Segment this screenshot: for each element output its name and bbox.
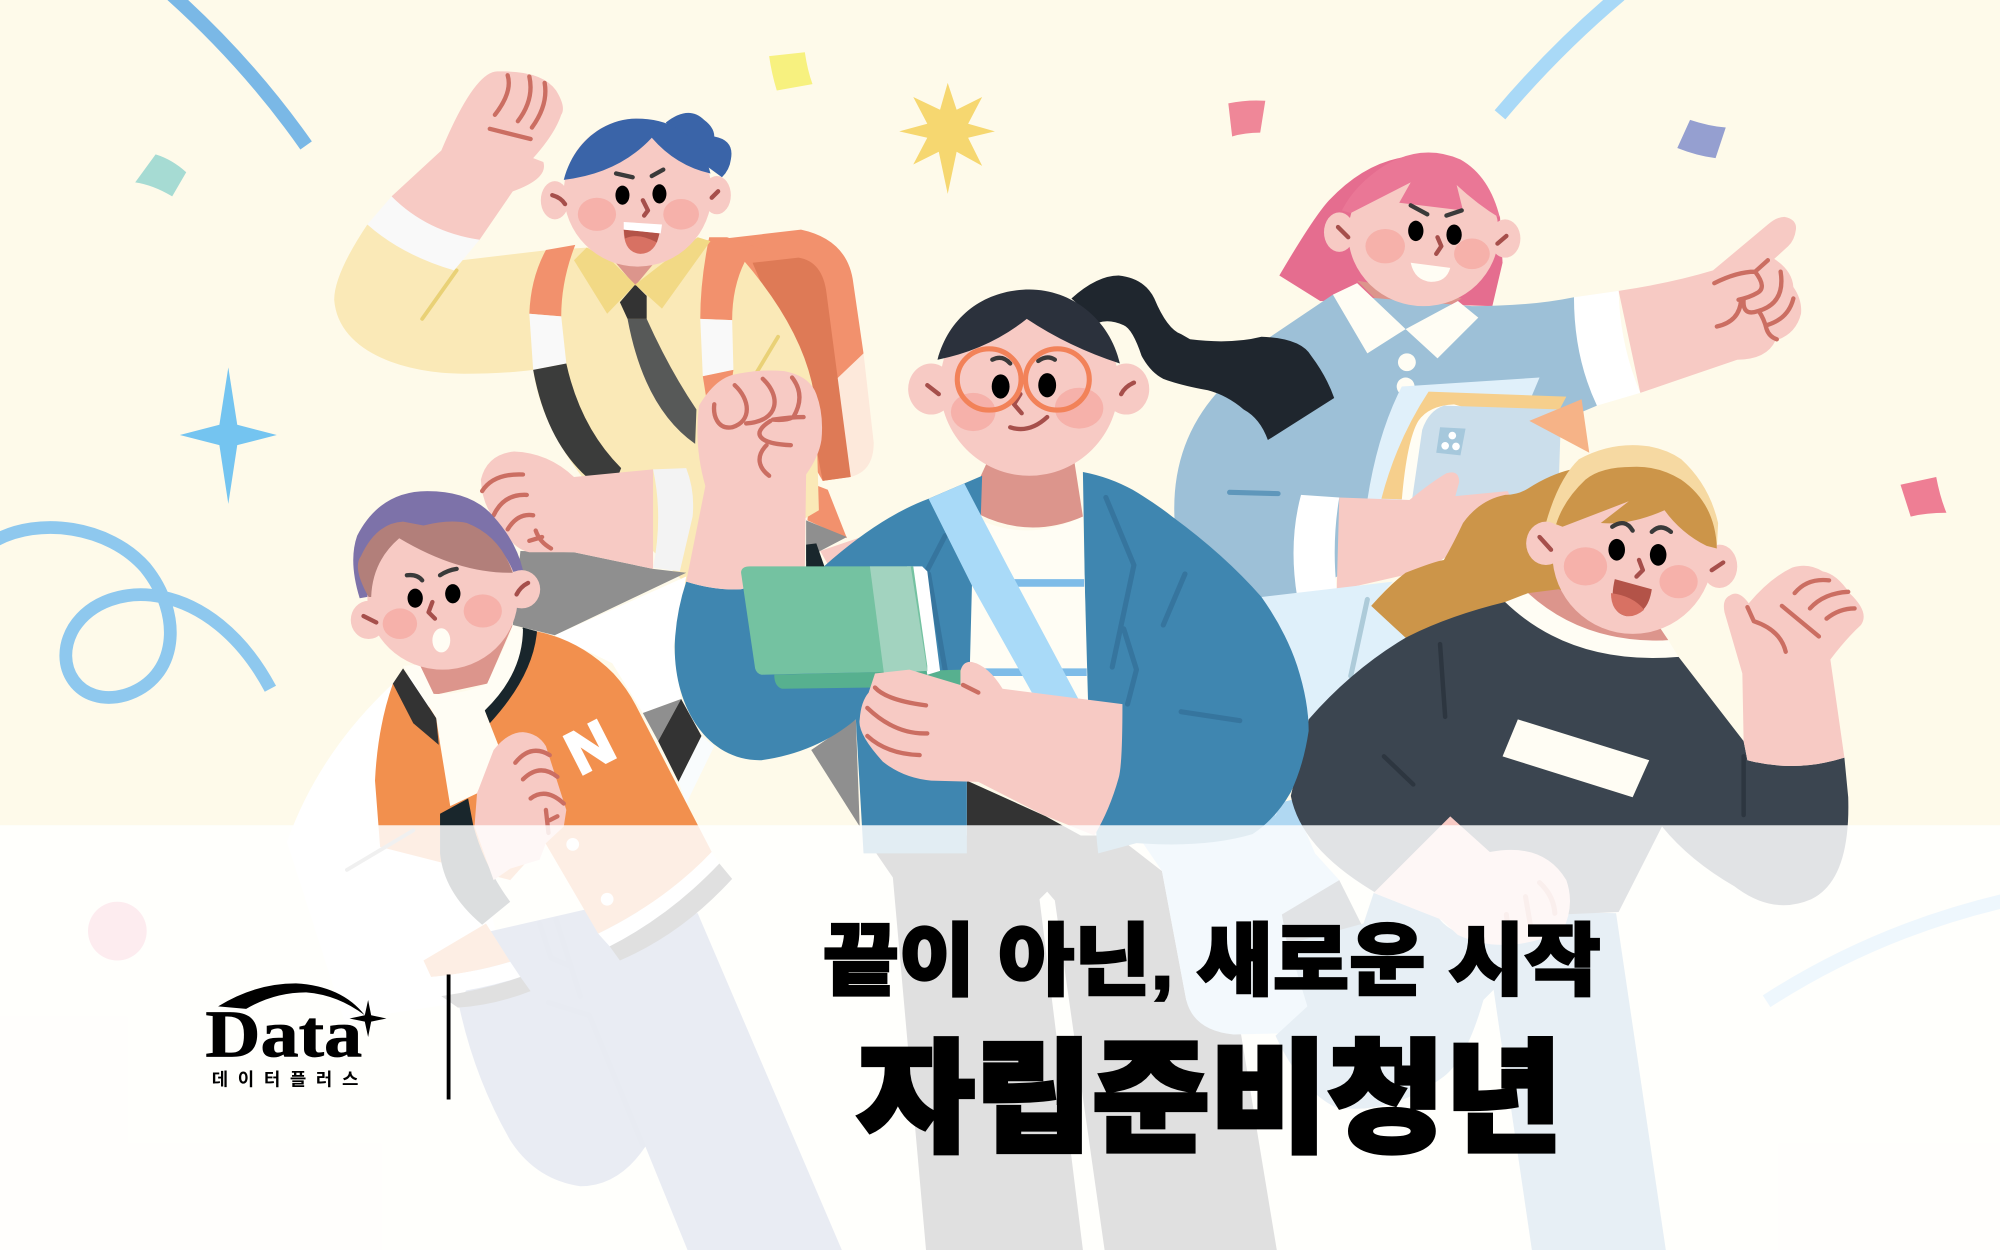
- cheek right: [1454, 239, 1490, 269]
- brows: [407, 569, 457, 580]
- brows: [1411, 205, 1462, 216]
- nose, smile and ear marks: [927, 383, 1134, 429]
- paper: [1367, 378, 1540, 504]
- strap orange tip: [703, 370, 733, 408]
- nose and ear marks: [1540, 537, 1723, 577]
- backpack inner: [753, 258, 851, 481]
- cheek right: [1055, 388, 1103, 429]
- shirt stripe lower: [985, 668, 1087, 676]
- collar left: [1333, 283, 1406, 353]
- lens right: [1026, 349, 1089, 410]
- lower bodies and legs: [287, 663, 1666, 1250]
- title: subtitle line: 끝이 아닌, 새로운 시작: [823, 917, 1601, 1006]
- orange sleeve lower left: [423, 923, 510, 977]
- brows: [992, 357, 1055, 364]
- lens left: [1441, 442, 1449, 450]
- button two: [1397, 378, 1415, 395]
- raised fist lines: [714, 378, 804, 476]
- raised arm and fist: [1724, 566, 1864, 766]
- backpack lower corner: [807, 483, 847, 538]
- book lower cover: [774, 670, 963, 689]
- hair: [564, 119, 710, 180]
- white scarf: [403, 625, 523, 806]
- sweater creases: [1384, 644, 1744, 815]
- strap orange part: [529, 245, 575, 316]
- face: [1348, 161, 1499, 306]
- icon: gold star: [899, 83, 995, 194]
- strap white part: [529, 314, 566, 370]
- dark lining: [440, 798, 510, 925]
- name badge: [1503, 719, 1649, 797]
- ear right: [1103, 364, 1149, 415]
- streamer: top left: [172, 0, 306, 145]
- hair bun: [666, 113, 731, 177]
- ear left: [1526, 522, 1566, 565]
- cuff: [1574, 291, 1640, 406]
- strap orange part: [700, 237, 765, 320]
- pointing hand lines: [1714, 260, 1793, 339]
- long hair: [1371, 469, 1571, 638]
- neck: [1357, 281, 1462, 329]
- jacket cuff white: [598, 852, 719, 946]
- phone camera: [1436, 427, 1466, 455]
- jacket letter N: N: [555, 708, 624, 787]
- collar right dark: [485, 628, 537, 723]
- camera lenses: [1441, 432, 1460, 450]
- eye right: [1650, 544, 1666, 566]
- grey trouser wedge: [811, 719, 860, 827]
- confetti: teal: [135, 154, 186, 196]
- ear right: [503, 570, 540, 608]
- pale strap: [679, 736, 714, 804]
- hair top: [1556, 467, 1717, 548]
- mouth: [432, 628, 450, 652]
- ear right: [1490, 219, 1520, 258]
- torso crease: [755, 337, 778, 375]
- button one: [566, 838, 579, 851]
- cheek right: [663, 199, 699, 230]
- logo wordmark: Data: [205, 999, 362, 1072]
- icon: blue sparkle: [180, 367, 277, 504]
- nose and ear marks: [552, 191, 718, 216]
- grey trouser triangle: [1282, 880, 1362, 950]
- jacket right panel: [1083, 472, 1309, 853]
- left white coat: [287, 663, 510, 1020]
- pale blue coat: [1261, 582, 1407, 816]
- eye right: [1446, 224, 1462, 245]
- ears: [541, 181, 569, 219]
- back hair: [1279, 156, 1503, 306]
- character: pink-haired woman pointing: [1174, 152, 1801, 597]
- confetti: purple: [1677, 120, 1726, 158]
- jacket buttons: [566, 838, 614, 906]
- torso: [533, 240, 819, 587]
- hand lines: [515, 751, 564, 833]
- neck: [420, 625, 513, 695]
- collar left: [574, 247, 635, 314]
- character: blue-haired boy with backpack: [334, 71, 874, 587]
- neck: [614, 260, 654, 286]
- backpack side panel: [816, 353, 874, 477]
- lower grey wedge: [643, 699, 681, 741]
- raised fist finger lines: [490, 75, 545, 139]
- backpack strap left: [529, 245, 621, 477]
- ear left: [1324, 212, 1355, 252]
- eye right: [652, 184, 666, 203]
- streamer: left swirl: [0, 528, 270, 697]
- eye right: [445, 584, 460, 603]
- backpack strap right: [700, 237, 765, 408]
- shirt buttons: [1397, 353, 1416, 395]
- face: [367, 524, 518, 670]
- white translucent band: [0, 825, 2000, 1250]
- logo: Data Plus: [205, 983, 386, 1089]
- jacket cuff dark: [610, 864, 732, 960]
- cheek left: [1564, 547, 1607, 585]
- streamer: bottom right: [1767, 901, 2000, 1001]
- brows: [616, 170, 663, 177]
- strap white part: [700, 319, 733, 376]
- black strap: [658, 699, 702, 782]
- book page edge: [907, 566, 940, 675]
- ear left: [351, 601, 386, 639]
- pocket line: [1230, 492, 1278, 494]
- vertical divider: [447, 974, 451, 1099]
- orange jacket: [375, 631, 712, 934]
- coat seam: [1351, 599, 1367, 676]
- shirt body: [1174, 295, 1597, 597]
- collar left dark: [393, 668, 439, 745]
- eye left: [992, 374, 1010, 399]
- sleeve cuff: [367, 196, 480, 270]
- coat crease: [347, 830, 413, 870]
- lens top: [1448, 432, 1456, 439]
- tie lower: [628, 319, 696, 444]
- eye left: [408, 589, 423, 608]
- phone white edge: [1402, 404, 1467, 500]
- face: [940, 295, 1119, 476]
- strap black part: [533, 364, 621, 477]
- left white body: [297, 684, 393, 842]
- bridge: [1020, 379, 1026, 383]
- eye left: [615, 186, 629, 205]
- shirt stripe upper: [1011, 579, 1084, 587]
- cheek right: [464, 594, 502, 628]
- sleeve crease: [422, 270, 457, 319]
- confetti: pink top: [1228, 100, 1265, 136]
- ear left: [908, 364, 954, 415]
- forearm cuff: [1294, 495, 1339, 597]
- ear right: [703, 176, 731, 214]
- orange triangle flap: [1529, 399, 1589, 453]
- backpack: [714, 230, 874, 538]
- eye left: [1608, 539, 1625, 561]
- brows: [1612, 523, 1671, 532]
- grey trouser wedge: [513, 551, 686, 635]
- lens left: [957, 349, 1021, 410]
- confetti: pink right: [1901, 477, 1946, 517]
- confetti: pink circle: [88, 902, 147, 960]
- yellow folder: [1381, 392, 1566, 500]
- fist lines: [1747, 580, 1855, 652]
- N boy trousers: [459, 909, 842, 1250]
- eye left: [1408, 221, 1423, 241]
- hat: [353, 491, 523, 598]
- hand holding book: [859, 662, 1122, 835]
- black trousers under arm: [967, 781, 1097, 880]
- lower dark cuff left: [441, 977, 531, 1008]
- mouth shadow: [624, 230, 659, 242]
- jacket creases: [927, 497, 1240, 721]
- pointing arm: [1619, 217, 1801, 393]
- eye right: [1038, 373, 1056, 397]
- teeth: [624, 222, 662, 233]
- skin sliver behind shoulder: [820, 534, 869, 566]
- cheek left: [951, 393, 996, 431]
- streamer: top right: [1500, 0, 1620, 115]
- hand on chest: [474, 732, 566, 880]
- smile: [1411, 263, 1450, 282]
- tie knot: [620, 284, 647, 319]
- tongue: [1611, 593, 1644, 616]
- neck: [1528, 589, 1668, 643]
- lens right: [1452, 443, 1460, 450]
- jacket left panel and sleeve: [675, 476, 982, 853]
- shoulder strap: [929, 483, 1079, 700]
- bangs: [1342, 152, 1500, 218]
- hand lines: [867, 685, 978, 755]
- white coat panel: [555, 577, 686, 713]
- blond trousers and lower body: [1276, 893, 1666, 1250]
- grey wedge behind fist: [806, 520, 847, 561]
- button two: [601, 893, 614, 906]
- nose and ear marks: [1338, 227, 1506, 254]
- lower hand: [1374, 816, 1570, 945]
- neck: [978, 459, 1083, 527]
- cheek left: [383, 608, 417, 639]
- pale coat blob: [1138, 800, 1339, 1034]
- raised arm and fist: [686, 370, 822, 589]
- mouth: [624, 230, 659, 254]
- character: blond woman in dark sweater: [1261, 445, 1864, 945]
- forearm: [1337, 472, 1531, 591]
- horizontal arm and hand: [481, 452, 653, 569]
- raised sleeve: [334, 224, 548, 374]
- sweater collar: [1505, 593, 1679, 658]
- character: girl with glasses and book: [675, 276, 1334, 880]
- hair: [358, 522, 513, 597]
- logo swoosh: [218, 983, 365, 1015]
- arm cuff: [653, 468, 693, 571]
- ponytail: [1071, 276, 1334, 440]
- raised arm and fist: [392, 71, 563, 269]
- cheek left: [578, 198, 616, 231]
- hand finger lines: [482, 474, 551, 548]
- backpack outer: [714, 230, 864, 481]
- cheek left: [1365, 229, 1405, 263]
- face: [564, 119, 712, 267]
- sweater: [1291, 602, 1848, 920]
- trouser creases: [540, 920, 643, 1145]
- cheek right: [1659, 565, 1698, 598]
- mouth: [1613, 579, 1652, 616]
- button one: [1398, 353, 1416, 371]
- logo Korean name: 데이터플러스: [212, 1069, 358, 1089]
- title: main heading: 자립준비청년: [857, 1031, 1562, 1168]
- logo sparkle: [349, 1000, 386, 1037]
- nose and ear marks: [364, 583, 528, 622]
- collar right: [1406, 301, 1478, 358]
- ear right: [1702, 545, 1737, 588]
- lower hand lines: [1506, 883, 1555, 936]
- white shirt: [968, 517, 1088, 714]
- phone: [1412, 406, 1561, 504]
- confetti: yellow: [769, 52, 812, 91]
- headband: [1546, 445, 1718, 548]
- character: N-jacket boy and background blocks: [297, 452, 847, 1008]
- black wedge behind fist: [806, 543, 825, 569]
- hair: [938, 290, 1120, 364]
- face: [1552, 473, 1713, 634]
- glasses: [957, 349, 1089, 410]
- book spine: [870, 566, 927, 673]
- main girl trousers: [876, 835, 1277, 1250]
- lower cuff white: [431, 962, 520, 994]
- book cover: [741, 566, 927, 675]
- collar right: [635, 237, 710, 309]
